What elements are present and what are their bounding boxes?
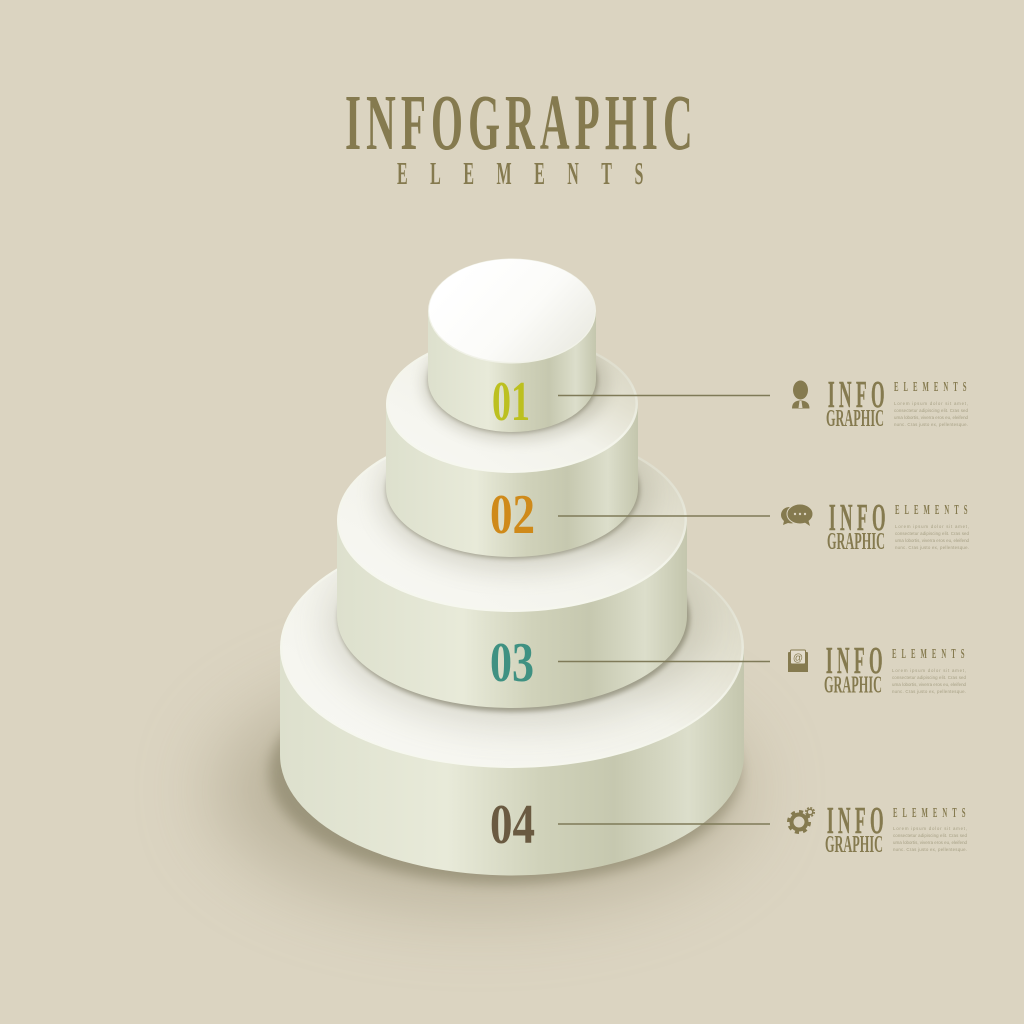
icon: gears <box>788 808 814 832</box>
label block 02: urna lobortis, viverra eros eu, eleifend <box>895 538 970 543</box>
label block 03: Lorem ipsum dolor sit amet, <box>892 668 966 673</box>
infographic canvas <box>196 96 969 934</box>
label block 02: GRAPHIC <box>827 529 885 555</box>
label block 01: Lorem ipsum dolor sit amet, <box>894 401 968 406</box>
label block 04: Lorem ipsum dolor sit amet, <box>893 826 967 831</box>
label block 03: nunc. Cras justo ex, pellentesque. <box>892 689 966 694</box>
label block 02: consectetur adipiscing elit. Cras sed <box>895 531 970 536</box>
label block 04: consectetur adipiscing elit. Cras sed <box>893 833 968 838</box>
label block 03: INFO <box>826 641 887 682</box>
connector line 01 <box>558 394 770 396</box>
label block 03: consectetur adipiscing elit. Cras sed <box>892 675 967 680</box>
label block 04: ELEMENTS <box>893 806 970 821</box>
label block 04: nunc. Cras justo ex, pellentesque. <box>893 847 967 852</box>
icon: person <box>792 380 810 408</box>
number 01: 01 <box>492 371 530 433</box>
label block 03: ELEMENTS <box>892 647 969 662</box>
tier 1 <box>428 258 596 432</box>
label block 01: nunc. Cras justo ex, pellentesque. <box>894 422 968 427</box>
label block 01: GRAPHIC <box>826 406 884 432</box>
label block 02 <box>827 498 972 555</box>
number 03: 03 <box>490 632 534 694</box>
label block 02: INFO <box>829 498 890 539</box>
connector line 03 <box>558 660 770 662</box>
title: ELEMENTS <box>397 156 666 192</box>
label block 04 <box>825 801 970 858</box>
title: INFOGRAPHIC <box>345 79 698 167</box>
number 02: 02 <box>490 484 535 546</box>
icon: chat bubbles <box>781 504 813 526</box>
icon: email envelope <box>788 650 808 672</box>
label block 01: INFO <box>828 375 889 416</box>
label block 03: urna lobortis, viverra eros eu, eleifend <box>892 682 967 687</box>
label block 04: GRAPHIC <box>825 832 883 858</box>
ground shadow <box>215 660 745 905</box>
label block 03 <box>824 641 969 698</box>
label block 02: Lorem ipsum dolor sit amet, <box>895 524 969 529</box>
tier 2 <box>386 352 638 557</box>
label block 02: ELEMENTS <box>895 503 972 518</box>
label block 01 <box>826 375 971 432</box>
number 04: 04 <box>490 794 535 856</box>
tier 3 <box>337 456 687 708</box>
connector line 04 <box>558 823 770 825</box>
connector line 02 <box>558 515 770 517</box>
tier 4 <box>280 568 744 876</box>
label block 01: ELEMENTS <box>894 380 971 395</box>
icon: email envelope: @ <box>793 653 803 664</box>
label block 01: consectetur adipiscing elit. Cras sed <box>894 408 969 413</box>
label block 04: INFO <box>827 801 888 842</box>
label block 04: urna lobortis, viverra eros eu, eleifend <box>893 840 968 845</box>
label block 01: urna lobortis, viverra eros eu, eleifend <box>894 415 969 420</box>
label block 02: nunc. Cras justo ex, pellentesque. <box>895 545 969 550</box>
label block 03: GRAPHIC <box>824 672 882 698</box>
